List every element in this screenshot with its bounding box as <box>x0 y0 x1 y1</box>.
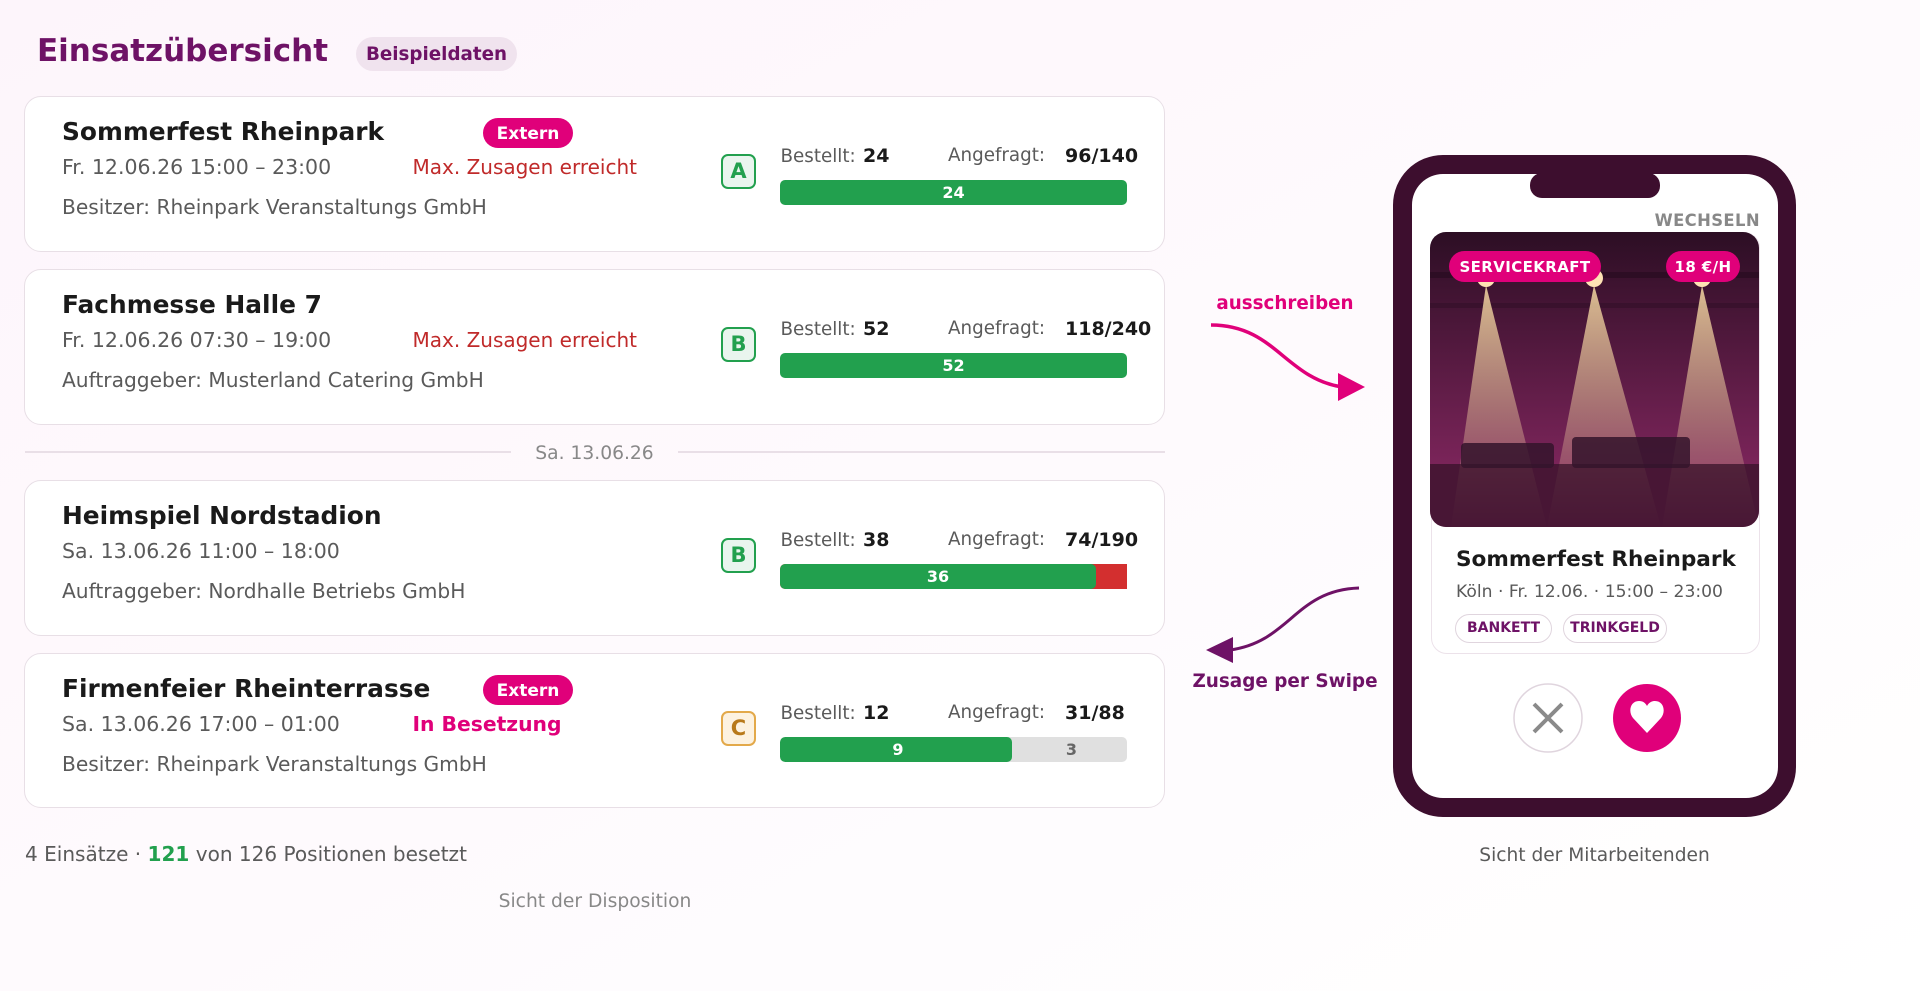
requested value: 74/190 <box>1065 529 1138 551</box>
tag: Beispieldaten <box>356 37 517 71</box>
progress bar: 36 <box>927 567 949 586</box>
panel: event card Heimspiel Nordstadion <box>24 480 1165 636</box>
progress bar: 9 <box>892 740 904 759</box>
date and time: Sa. 13.06.26 11:00 – 18:00 <box>62 539 340 563</box>
label: Zusage per Swipe: Zusage per Swipe <box>1192 671 1378 692</box>
date and time: Fr. 12.06.26 15:00 – 23:00 <box>62 155 331 179</box>
requested label: Angefragt: <box>948 702 1045 723</box>
ordered count: Bestellt: 24 <box>780 145 889 167</box>
job card body <box>1430 232 1760 654</box>
progress bar <box>780 564 1127 589</box>
extern tag: Extern <box>497 124 559 144</box>
chip: Trinkgeld <box>1563 614 1667 642</box>
extern tag <box>483 118 573 148</box>
event name: Heimspiel Nordstadion <box>62 500 382 530</box>
caption: Sicht der Disposition: Sicht der Disposition <box>499 891 691 912</box>
requested label: Angefragt: <box>948 529 1045 550</box>
phone mockup <box>1393 155 1796 817</box>
status: In Besetzung <box>412 712 561 736</box>
tag: Beispieldaten: Beispieldaten <box>366 44 507 65</box>
event name: Sommerfest Rheinpark <box>62 116 384 146</box>
date and time: Sa. 13.06.26 17:00 – 01:00 <box>62 712 340 736</box>
owner: Besitzer: Rheinpark Veranstaltungs GmbH <box>62 194 487 218</box>
job illustration: venue with spotlights <box>1430 232 1759 527</box>
client: Auftraggeber: Musterland Catering GmbH <box>62 368 484 392</box>
requested value: 118/240 <box>1065 318 1151 340</box>
extern tag: Extern <box>497 681 559 701</box>
progress bar <box>780 353 1127 378</box>
grade badge B <box>721 538 756 573</box>
ordered count: Bestellt: 52 <box>780 318 889 340</box>
panel: event card Firmenfeier Rheinterrasse <box>24 652 1165 808</box>
title: Einsatzübersicht <box>37 33 328 69</box>
progress bar: 3 <box>1066 740 1077 759</box>
date and time: Fr. 12.06.26 07:30 – 19:00 <box>62 328 331 352</box>
extern tag <box>483 675 573 705</box>
arrow: Zusage per Swipe <box>1206 586 1360 663</box>
progress bar <box>780 180 1127 205</box>
status: Max. Zusagen erreicht <box>412 155 637 179</box>
panel: event card Sommerfest Rheinpark <box>24 96 1165 252</box>
status: Max. Zusagen erreicht <box>412 328 637 352</box>
event name: Firmenfeier Rheinterrasse <box>62 674 430 702</box>
role tag: SERVICEKRAFT <box>1459 258 1591 276</box>
arrow: ausschreiben <box>1211 323 1365 401</box>
button: accept heart <box>1613 684 1681 752</box>
grade badge C: C <box>731 716 746 740</box>
panel: event card Fachmesse Halle 7 <box>24 268 1165 424</box>
progress bar: 52 <box>942 356 965 375</box>
grade badge A <box>721 154 756 189</box>
summary line: 4 Einsätze · 121 von 126 Positionen besetzt <box>25 842 467 866</box>
client: Auftraggeber: Nordhalle Betriebs GmbH <box>62 578 465 602</box>
divider date: Sa. 13.06.26 <box>535 443 654 464</box>
button: reject <box>1513 683 1583 753</box>
requested label: Angefragt: <box>948 318 1045 339</box>
ordered count: Bestellt: 38 <box>780 529 889 551</box>
requested value: 96/140 <box>1065 145 1138 167</box>
grade badge B: B <box>730 332 746 356</box>
pay tag <box>1666 251 1740 282</box>
ordered count: Bestellt: 12 <box>780 702 889 724</box>
requested value: 31/88 <box>1065 702 1125 724</box>
grade badge B: B <box>730 543 746 567</box>
chip: Trinkgeld: TRINKGELD <box>1570 620 1660 636</box>
caption: Sicht der Mitarbeitenden: Sicht der Mitarbeitenden <box>1479 845 1710 866</box>
grade badge A: A <box>730 159 747 183</box>
chip: Bankett <box>1455 614 1552 642</box>
role tag <box>1449 251 1601 282</box>
owner: Besitzer: Rheinpark Veranstaltungs GmbH <box>62 752 487 776</box>
switch link: WECHSELN <box>1655 211 1760 230</box>
pay tag: 18 €/H <box>1675 258 1731 276</box>
phone notch <box>1530 173 1660 198</box>
progress bar <box>780 737 1127 762</box>
job details: Köln · Fr. 12.06. · 15:00 – 23:00 <box>1456 582 1723 602</box>
label: ausschreiben: ausschreiben <box>1216 293 1354 314</box>
event name: Fachmesse Halle 7 <box>62 290 322 318</box>
requested label: Angefragt: <box>948 145 1045 166</box>
grade badge C <box>721 711 756 746</box>
chip: Bankett: BANKETT <box>1467 620 1540 636</box>
grade badge B <box>721 327 756 362</box>
job title: Sommerfest Rheinpark <box>1456 547 1736 572</box>
progress bar: 24 <box>942 183 965 202</box>
